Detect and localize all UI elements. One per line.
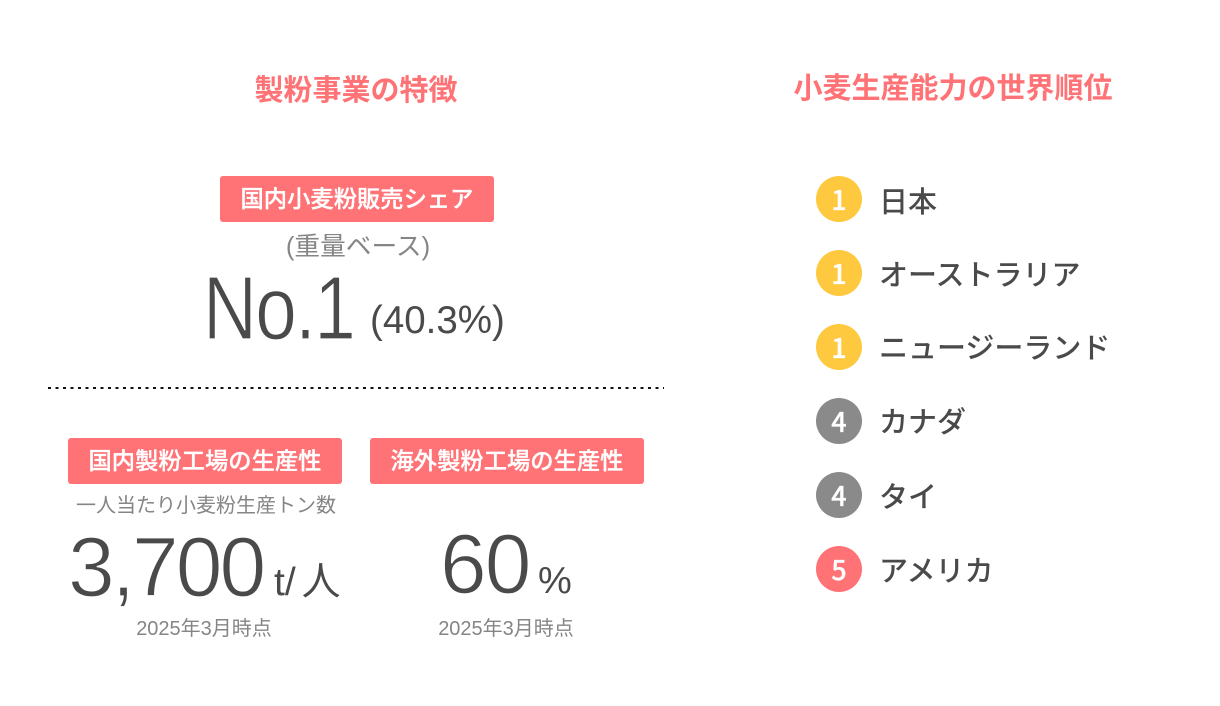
rank badge: USA: 5	[831, 549, 847, 588]
rank badge: Japan	[816, 176, 862, 222]
rank badge: New Zealand	[816, 324, 862, 370]
rank badge: USA	[816, 546, 862, 592]
rank badge: Canada: 4	[831, 401, 847, 440]
stat: No.1 share: No.1	[203, 259, 354, 359]
tag: domestic productivity: 国内製粉工場の生産性	[89, 442, 321, 476]
rank badge: New Zealand: 1	[831, 327, 847, 366]
text: weight basis: (重量ベース)	[286, 233, 430, 261]
tag: overseas productivity	[370, 438, 644, 484]
country: Japan: 日本	[879, 179, 937, 221]
country: New Zealand: ニュージーランド	[879, 325, 1110, 367]
tag: domestic share: 国内小麦粉販売シェア	[241, 180, 473, 214]
heading: milling features: 製粉事業の特徴	[254, 75, 458, 107]
note: date right: 2025年3月時点	[438, 618, 574, 640]
stat unit: t per person: t/人	[274, 561, 341, 604]
text: tons per person: 一人当たり小麦粉生産トン数	[76, 495, 336, 517]
tag: domestic share	[220, 176, 494, 222]
stat: 3,700 t per person: 3,700	[68, 520, 263, 614]
dotted divider	[48, 387, 664, 389]
tag: overseas productivity: 海外製粉工場の生産性	[391, 442, 623, 476]
rank badge: Australia: 1	[831, 253, 847, 292]
country: Thailand: タイ	[879, 474, 937, 516]
country: Australia: オーストラリア	[879, 252, 1081, 294]
country: Canada: カナダ	[879, 399, 966, 441]
stat: 60 percent: 60	[440, 517, 529, 611]
rank badge: Thailand	[816, 472, 862, 518]
rank badge: Australia	[816, 250, 862, 296]
stat: share percentage: (40.3%)	[370, 299, 505, 342]
rank badge: Thailand: 4	[831, 475, 847, 514]
tag: domestic productivity	[68, 438, 342, 484]
rank badge: Canada	[816, 398, 862, 444]
country: USA: アメリカ	[879, 548, 994, 590]
note: date left: 2025年3月時点	[136, 618, 272, 640]
heading: world ranking: 小麦生産能力の世界順位	[793, 73, 1112, 105]
stat unit: percent: %	[538, 560, 572, 602]
rank badge: Japan: 1	[831, 179, 847, 218]
